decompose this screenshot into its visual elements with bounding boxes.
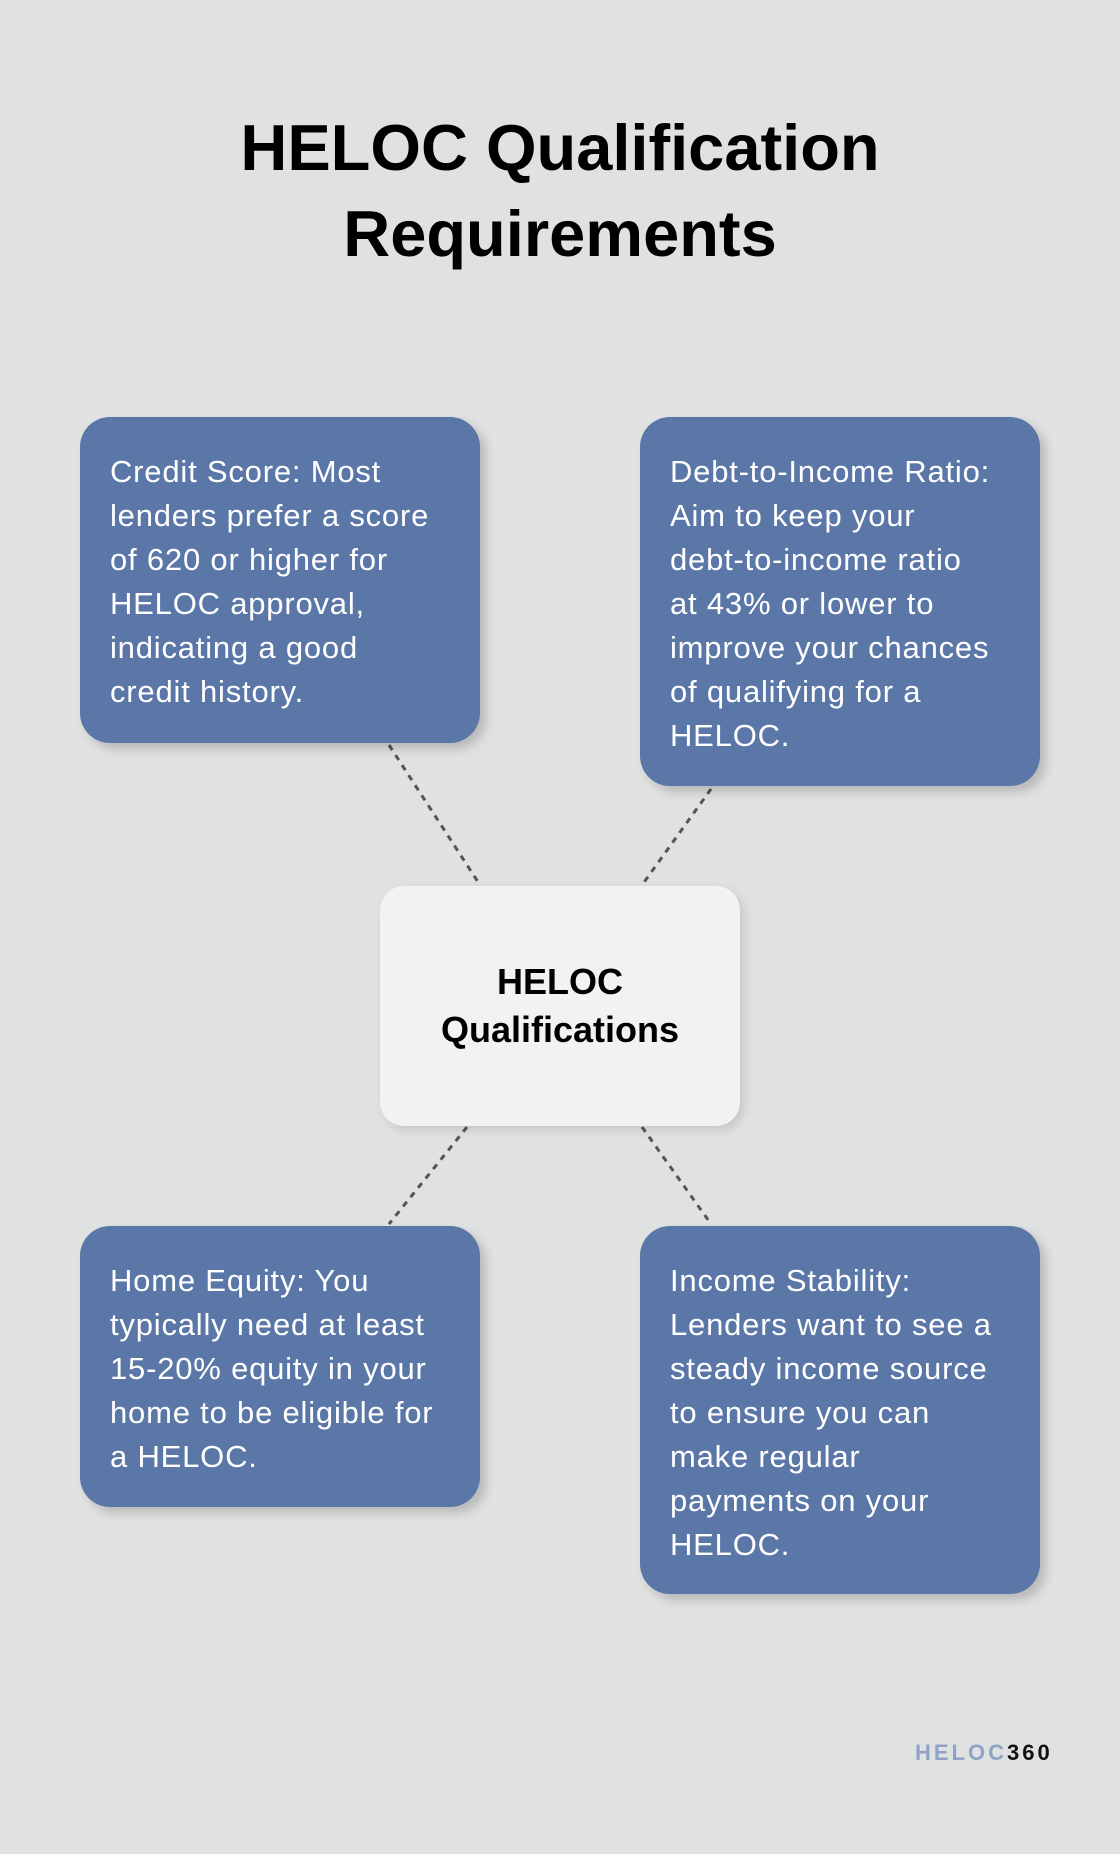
panel: debt-to-income: Debt-to-Income Ratio: [670,454,990,489]
center node: Qualifications [441,1009,679,1050]
panel: credit score: Credit Score: Most [110,454,381,489]
logo: HELOC360 [915,1740,1053,1765]
panel: home equity: home to be eligible for [110,1395,433,1430]
panel: income stability: steady income source [670,1351,988,1386]
panel: income stability: payments on your [670,1483,929,1518]
title: Requirements [343,197,777,270]
panel: debt-to-income: debt-to-income ratio [670,542,962,577]
panel: debt-to-income: HELOC. [670,718,790,753]
center node [380,886,740,1126]
panel: income stability: Lenders want to see a [670,1307,992,1342]
panel: income stability: HELOC. [670,1527,790,1562]
panel: credit score: of 620 or higher for [110,542,388,577]
panel: debt-to-income: at 43% or lower to [670,586,934,621]
panel: credit score: lenders prefer a score [110,498,429,533]
center node: HELOC [497,961,623,1002]
panel: home equity: typically need at least [110,1307,425,1342]
panel: debt-to-income: Aim to keep your [670,498,915,533]
panel: income stability [640,1226,1040,1594]
panel: income stability: Income Stability: [670,1263,911,1298]
panel: credit score: credit history. [110,674,304,709]
panel: credit score: indicating a good [110,630,358,665]
panel: credit score: HELOC approval, [110,586,365,621]
panel: home equity [80,1226,480,1507]
panel: debt-to-income [640,417,1040,786]
panel: home equity: 15-20% equity in your [110,1351,427,1386]
title [240,111,880,270]
panel: income stability: make regular [670,1439,861,1474]
panel: home equity: a HELOC. [110,1439,258,1474]
panel: debt-to-income: improve your chances [670,630,989,665]
panel: debt-to-income: of qualifying for a [670,674,921,709]
panel: credit score [80,417,480,743]
panel: income stability: to ensure you can [670,1395,930,1430]
panel: home equity: Home Equity: You [110,1263,369,1298]
title: HELOC Qualification [240,111,880,184]
